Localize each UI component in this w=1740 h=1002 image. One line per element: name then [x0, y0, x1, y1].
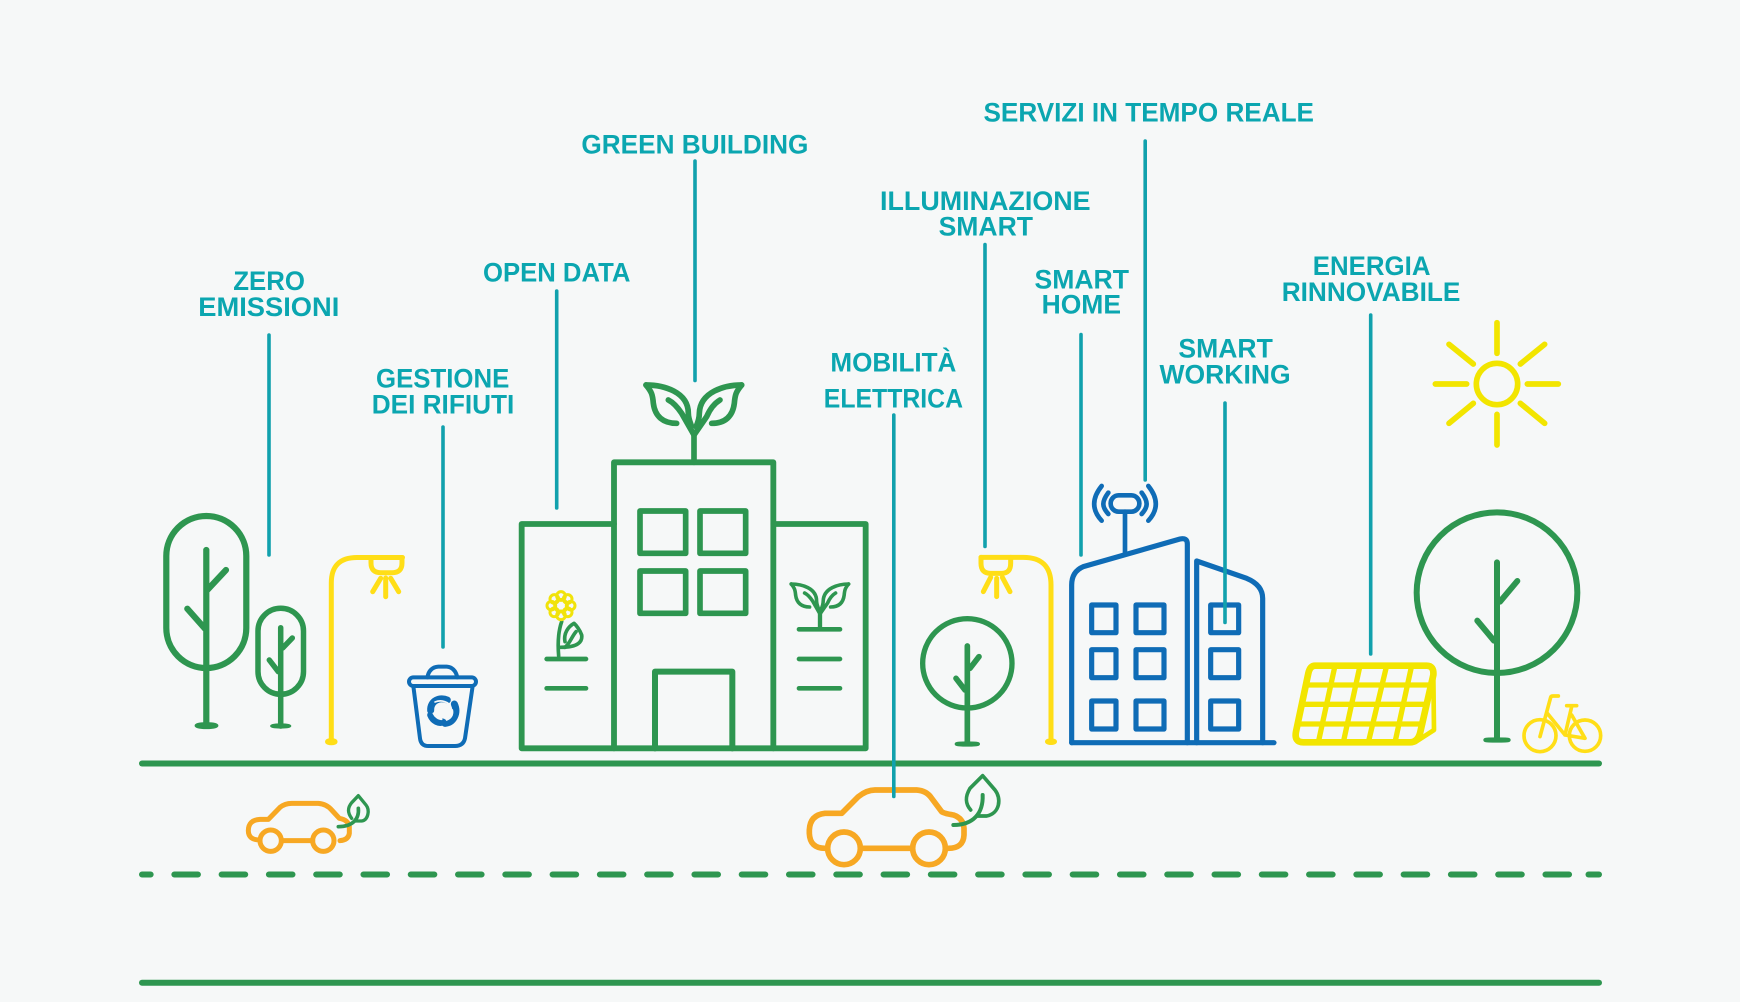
- tree: small capsule: [258, 608, 304, 727]
- label: smart home: SMART: [1034, 264, 1129, 294]
- car body: [809, 790, 964, 865]
- tree: small round: [923, 619, 1012, 745]
- label: smart home: HOME: [1042, 289, 1121, 319]
- label: energia rinnovabile: ENERGIA: [1313, 251, 1430, 281]
- door: [655, 672, 732, 748]
- label: servizi in tempo reale: SERVIZI IN TEMPO REALE: [984, 98, 1314, 128]
- label: green building: GREEN BUILDING: [581, 129, 808, 159]
- central tower: [614, 462, 773, 748]
- solar panel: [1296, 666, 1434, 742]
- label: mobilità elettrica: MOBILITÀ: [830, 347, 956, 378]
- right wing small sprout: [791, 584, 849, 688]
- label: zero emissioni: EMISSIONI: [198, 292, 339, 322]
- label: energia rinnovabile: RINNOVABILE: [1282, 277, 1460, 307]
- roof sprout: [646, 385, 742, 462]
- label: illuminazione smart: [880, 186, 1091, 242]
- sun: [1435, 323, 1558, 445]
- right wing: [773, 524, 866, 748]
- label: smart working: [1160, 334, 1291, 389]
- label: smart working: WORKING: [1160, 359, 1291, 389]
- leaf: [953, 776, 999, 825]
- label: zero emissioni: [198, 266, 339, 322]
- label: illuminazione smart: ILLUMINAZIONE: [880, 186, 1091, 216]
- label: smart home: [1034, 264, 1129, 319]
- label: mobilità elettrica: ELETTRICA: [824, 384, 963, 414]
- street lamp left: [327, 558, 402, 744]
- label: mobilità elettrica: [824, 347, 963, 414]
- label: illuminazione smart: SMART: [939, 212, 1033, 242]
- road: [142, 764, 1599, 983]
- icon: antenna: [1094, 486, 1156, 553]
- recycling bin: [409, 667, 476, 746]
- blue smart building: [1072, 486, 1274, 743]
- label: gestione dei rifiuti: GESTIONE: [376, 363, 509, 393]
- car large with leaf: [809, 776, 999, 865]
- windows: [1092, 605, 1239, 729]
- bicycle: [1524, 696, 1601, 752]
- label: zero emissioni: ZERO: [233, 266, 305, 296]
- leaf: [338, 796, 368, 827]
- label: smart working: SMART: [1178, 334, 1273, 364]
- street lamp right: [981, 557, 1055, 743]
- tree: tall capsule: [166, 516, 246, 727]
- icon: yellow flower: [547, 592, 575, 620]
- leader lines: [269, 141, 1371, 796]
- tree: big round: [1417, 512, 1577, 741]
- label: gestione dei rifiuti: [372, 363, 514, 419]
- left wing: [522, 524, 614, 748]
- windows: [640, 511, 746, 613]
- label: gestione dei rifiuti: DEI RIFIUTI: [372, 389, 514, 419]
- label: energia rinnovabile: [1282, 251, 1460, 307]
- car small with leaf: [248, 796, 368, 851]
- icon: recycle symbol: [431, 699, 456, 723]
- left wing flower: [547, 592, 586, 688]
- car body: [248, 803, 349, 851]
- green building: [522, 385, 866, 748]
- label: open data: OPEN DATA: [483, 258, 630, 288]
